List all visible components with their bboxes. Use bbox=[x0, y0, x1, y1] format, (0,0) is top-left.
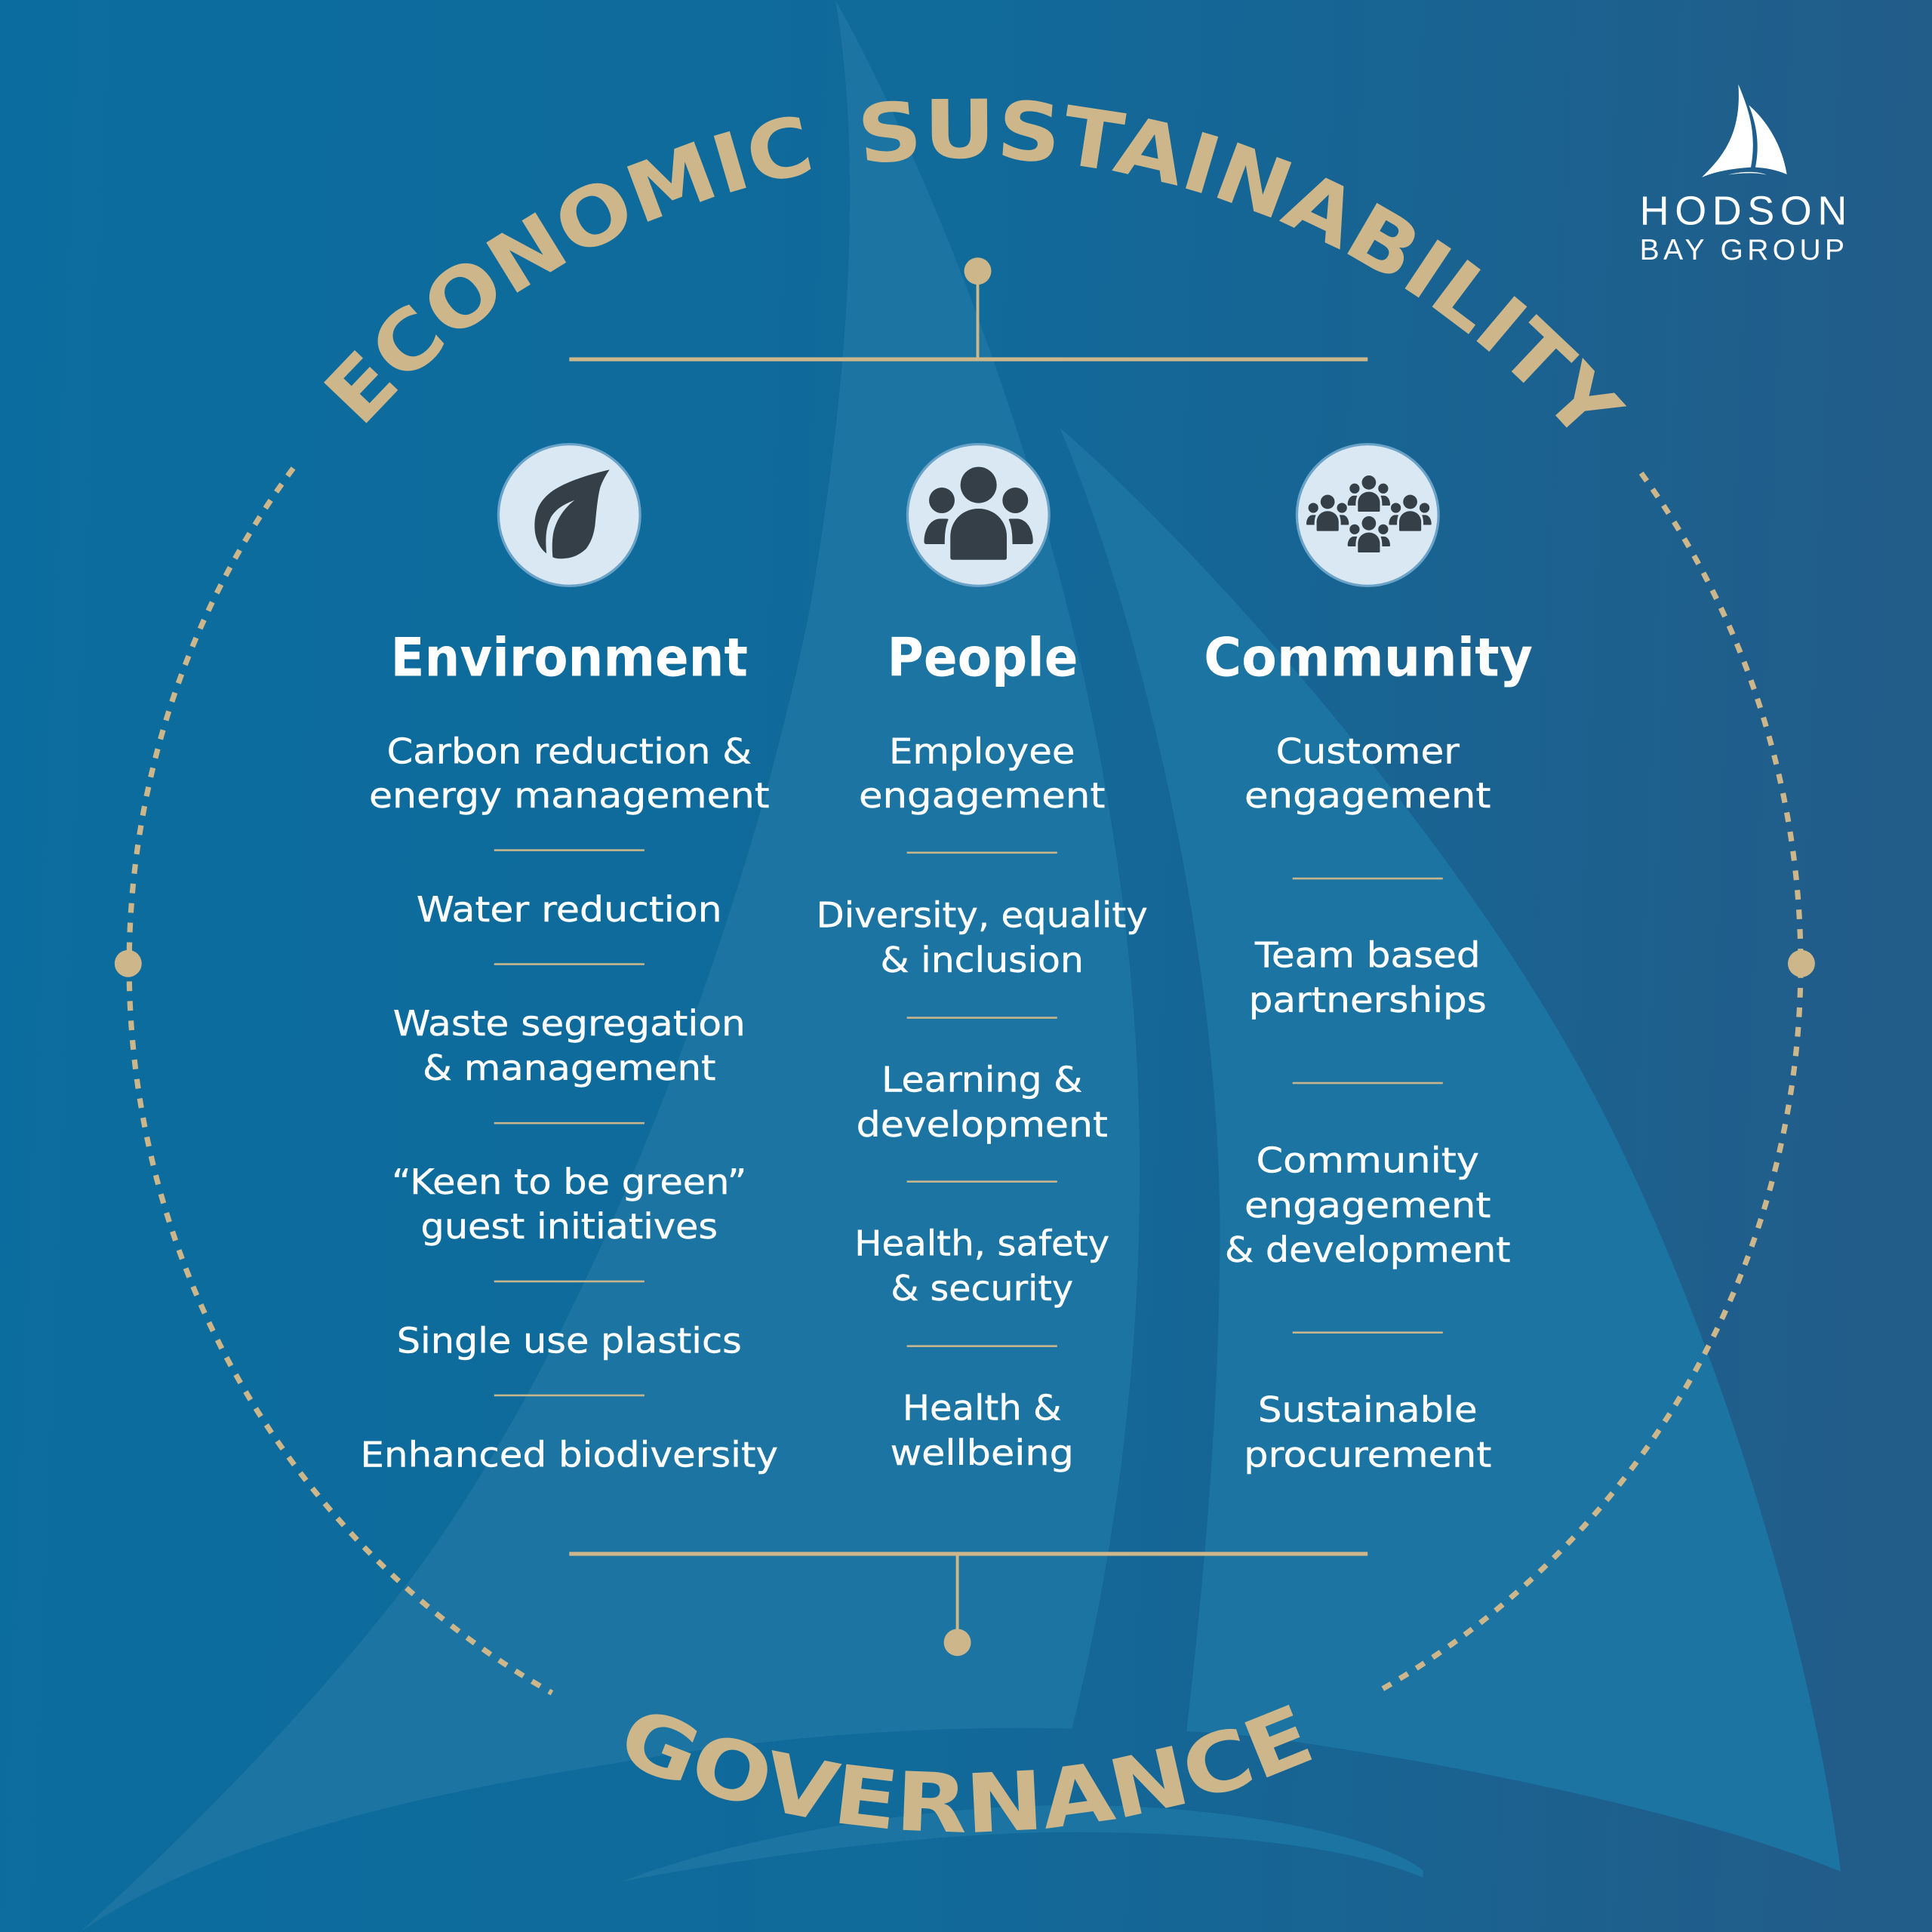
item: sustainable procurement bbox=[1244, 1389, 1491, 1475]
item: team partnerships: Team based bbox=[1254, 935, 1481, 976]
item: sustainable procurement: Sustainable bbox=[1258, 1389, 1478, 1430]
item: employee engagement: engagement bbox=[859, 775, 1105, 816]
item: keen to be green: guest initiatives bbox=[421, 1206, 718, 1247]
dot left bbox=[115, 950, 142, 977]
second sail bbox=[1060, 428, 1841, 1872]
title: governance: GOVERNANCE bbox=[626, 1704, 1312, 1832]
bottom connector bbox=[569, 1552, 1367, 1656]
item: community engagement bbox=[1225, 1140, 1511, 1270]
dashed circle right bbox=[1377, 473, 1801, 1692]
item: diversity: Diversity, equality bbox=[817, 895, 1148, 936]
item: diversity bbox=[817, 895, 1148, 980]
icon: community bbox=[1297, 445, 1438, 586]
top connector bbox=[569, 257, 1367, 361]
item: keen to be green: “Keen to be green” bbox=[392, 1161, 746, 1202]
icon: leaf bbox=[498, 445, 640, 586]
item: customer engagement: engagement bbox=[1244, 775, 1491, 816]
heading: community: Community bbox=[1204, 627, 1533, 689]
item: carbon reduction bbox=[369, 731, 770, 816]
logo text: hodson: HODSON bbox=[1640, 188, 1847, 233]
item: health safety: Health, safety bbox=[854, 1223, 1109, 1264]
item: waste segregation: & management bbox=[423, 1048, 716, 1088]
item: waste segregation bbox=[393, 1003, 746, 1088]
panel: community bbox=[1204, 627, 1533, 1475]
item: community engagement: Community bbox=[1256, 1140, 1479, 1180]
logo text: bay group: BAY GROUP bbox=[1640, 234, 1844, 266]
item: customer engagement: Customer bbox=[1276, 731, 1460, 771]
item: health safety: & security bbox=[891, 1268, 1073, 1309]
item: learning: Learning & bbox=[881, 1060, 1082, 1100]
icon: people bbox=[907, 445, 1049, 586]
item: keen to be green bbox=[392, 1161, 746, 1247]
item: waste segregation: Waste segregation bbox=[393, 1003, 746, 1044]
icon: sailboat bbox=[1702, 85, 1787, 177]
item: health safety bbox=[854, 1223, 1109, 1309]
item: carbon reduction: energy management bbox=[369, 775, 770, 816]
item: diversity: & inclusion bbox=[881, 940, 1084, 980]
item: carbon reduction: Carbon reduction & bbox=[387, 731, 752, 771]
item: employee engagement bbox=[859, 731, 1105, 816]
item: wellbeing bbox=[891, 1388, 1074, 1473]
item: sustainable procurement: procurement bbox=[1244, 1435, 1491, 1475]
item: enhanced biodiversity: Enhanced biodiversity bbox=[361, 1435, 778, 1475]
dashed circle left bbox=[129, 468, 552, 1693]
title: economic sustainability: ECONOMIC SUSTAINABILITY bbox=[324, 98, 1627, 428]
item: community engagement: engagement bbox=[1244, 1185, 1491, 1226]
panel: people bbox=[817, 627, 1148, 1473]
item: wellbeing: wellbeing bbox=[891, 1432, 1074, 1473]
item: team partnerships: partnerships bbox=[1249, 980, 1487, 1020]
item: team partnerships bbox=[1249, 935, 1487, 1020]
heading: environment: Environment bbox=[391, 627, 748, 689]
item: water reduction: Water reduction bbox=[417, 889, 722, 930]
dot right bbox=[1788, 950, 1815, 977]
heading: people: People bbox=[888, 627, 1078, 689]
item: customer engagement bbox=[1244, 731, 1491, 816]
item: learning bbox=[857, 1060, 1108, 1145]
main sail bbox=[80, 0, 1140, 1932]
logo: hodson bay group bbox=[1640, 85, 1847, 266]
item: community engagement: & development bbox=[1225, 1229, 1511, 1270]
panel: environment bbox=[361, 627, 778, 1475]
item: learning: development bbox=[857, 1104, 1108, 1145]
item: wellbeing: Health & bbox=[903, 1388, 1062, 1429]
item: single use plastics: Single use plastics bbox=[397, 1321, 742, 1361]
item: employee engagement: Employee bbox=[889, 731, 1075, 771]
small swoosh bbox=[622, 1805, 1423, 1881]
